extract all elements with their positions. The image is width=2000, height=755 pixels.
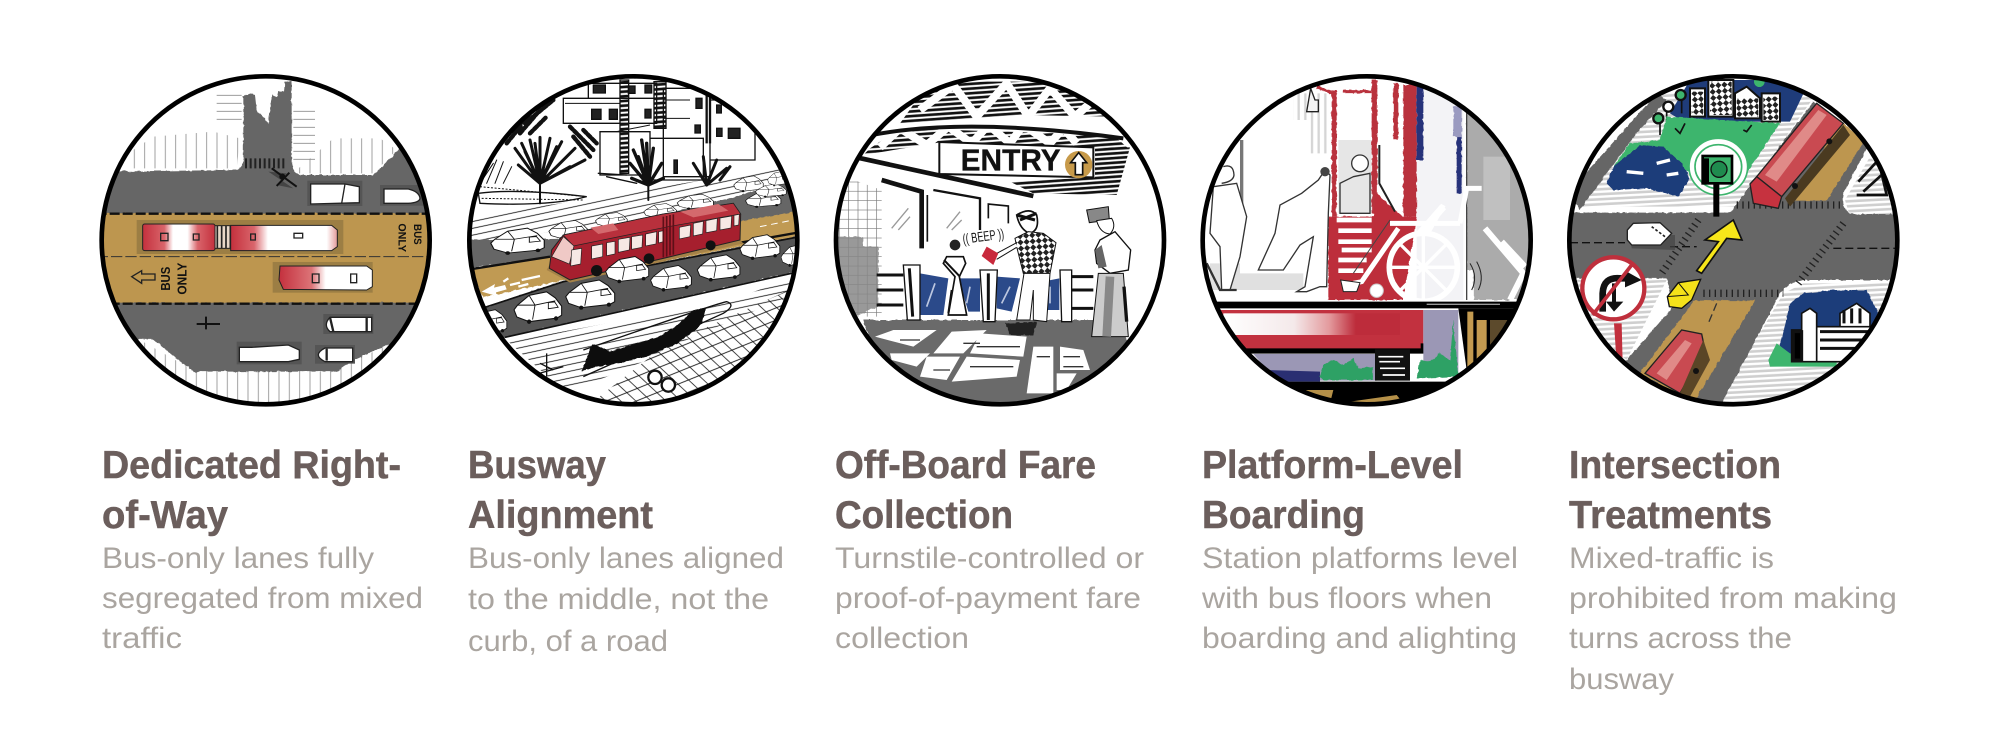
description: Bus-only lanes fully (102, 542, 374, 575)
illustration: intersection with signal and turn restriction (1563, 73, 1903, 410)
grey right side panel (1467, 110, 1537, 300)
yellow turning arrow (1697, 220, 1742, 273)
description: curb, of a road (468, 625, 668, 658)
bus-only lanes (97, 213, 437, 303)
security officer (1087, 207, 1131, 337)
green park and blue pond (1607, 117, 1780, 197)
no-turn sign (1582, 257, 1644, 363)
illustration: top-down busway with bus-only lanes (97, 73, 437, 410)
panel: dedicated right-of-way (97, 73, 437, 655)
bus lane (470, 210, 803, 297)
heading (102, 444, 401, 537)
text: off-board fare collection (835, 444, 1144, 655)
road marking: BUS ONLY, left (132, 262, 190, 295)
text: dedicated right-of-way (102, 444, 423, 655)
description: prohibited from making (1569, 582, 1897, 615)
dark lane with gold stripes (1277, 308, 1537, 410)
cars in mixed traffic (237, 181, 423, 364)
heading: Dedicated Right- (102, 444, 401, 487)
description: Station platforms level (1202, 542, 1518, 575)
red bus, lower (1645, 330, 1710, 397)
red articulated bus (547, 203, 743, 283)
red buses (137, 220, 373, 293)
heading: Collection (835, 494, 1013, 537)
description: segregated from mixed (102, 582, 423, 615)
passenger with card (982, 211, 1056, 335)
yellow taxi (1667, 279, 1701, 308)
bus lanes (1795, 120, 1865, 201)
description: turns across the (1569, 622, 1792, 655)
heading (1569, 444, 1781, 537)
heading (1202, 444, 1463, 537)
icon: gold circle with up arrow (1065, 151, 1092, 178)
upper mixed-traffic road with side street (97, 82, 437, 215)
heading (468, 444, 653, 537)
asphalt cross streets (1567, 102, 1903, 407)
pale interior background (1293, 93, 1330, 153)
motorbike at junction (268, 168, 297, 188)
road marking: BUS ONLY, left: ONLY (176, 262, 190, 295)
description: traffic (102, 622, 182, 655)
heading: of-Way (102, 494, 228, 537)
description: proof-of-payment fare (835, 582, 1141, 615)
illustration: wheelchair boarding from level platform (1197, 73, 1537, 410)
step box (1375, 349, 1410, 381)
truss at right (1857, 160, 1887, 195)
cars in front of the bus (471, 235, 808, 335)
red bus, upper (1750, 103, 1850, 208)
woman passenger (943, 240, 967, 315)
heading: Treatments (1569, 494, 1772, 537)
description: busway (1569, 663, 1674, 696)
floor planks (863, 320, 1130, 407)
description (1569, 542, 1897, 696)
red door frame (1317, 80, 1462, 300)
wire fence and grey building (838, 181, 882, 317)
description: Bus-only lanes aligned (468, 542, 784, 575)
road marking: BUS ONLY, right (398, 224, 422, 252)
grass (1320, 320, 1458, 380)
description: boarding and alighting (1202, 622, 1517, 655)
white car (1627, 223, 1675, 250)
description (102, 542, 423, 655)
background buildings and trees (1653, 76, 1810, 135)
illustration: station entry with turnstiles (830, 73, 1170, 410)
illustration: articulated bus in median busway (463, 73, 808, 410)
trees and foliage (483, 100, 730, 203)
roof truss (853, 82, 1130, 196)
road marking: BUS ONLY, right: ONLY (395, 223, 407, 252)
description (468, 542, 784, 658)
entry sign: ENTRY (961, 144, 1061, 178)
bicycle in lower road (197, 317, 220, 329)
wheelchair (1341, 188, 1482, 301)
upper traffic lane (472, 184, 792, 268)
description: Mixed-traffic is (1569, 542, 1774, 575)
panel: busway alignment (463, 73, 808, 658)
heading: Busway (468, 444, 606, 487)
description (835, 542, 1144, 655)
lower mixed-traffic road (97, 302, 437, 372)
text: platform-level boarding (1201, 444, 1518, 655)
road marking: BUS ONLY, right: BUS (411, 224, 423, 245)
lane marking: arrow and bus text (482, 276, 540, 296)
lower right building (1768, 290, 1878, 367)
rails behind gates (877, 275, 1093, 308)
light grey land blocks (1570, 93, 1903, 407)
blue turnstile gates (920, 273, 1059, 315)
sidewalk hatching (472, 169, 780, 240)
minor road (1575, 97, 1662, 200)
description: with bus floors when (1201, 582, 1492, 615)
panel: intersection treatments (1563, 73, 1903, 696)
description: collection (835, 622, 969, 655)
entry sign (939, 142, 1093, 178)
text: intersection treatments (1569, 444, 1897, 696)
green traffic signal (1689, 138, 1748, 217)
purple-grey shadow ground (1253, 310, 1458, 381)
text: busway alignment (468, 444, 784, 658)
heading: Boarding (1202, 494, 1365, 537)
description: Turnstile-controlled or (835, 542, 1144, 575)
standing passenger at left (1207, 166, 1247, 290)
lamp (1307, 88, 1318, 112)
heading: Platform-Level (1202, 444, 1463, 487)
crosswalks (1662, 205, 1843, 293)
heading: Intersection (1569, 444, 1781, 487)
seated passenger (1258, 155, 1370, 292)
beep sound label: (( BEEP )) (962, 225, 1005, 247)
red bus-side platform (1210, 304, 1537, 351)
turnstile posts (903, 265, 1072, 322)
panel: platform-level boarding (1197, 73, 1537, 655)
description (1201, 542, 1518, 655)
heading: Off-Board Fare (835, 444, 1096, 487)
cars behind the bus (491, 171, 788, 255)
background buildings (563, 80, 755, 180)
door steps (1337, 220, 1372, 271)
lower sidewalk, planting and paving (510, 283, 790, 402)
heading: Alignment (468, 494, 653, 537)
description: to the middle, not the (468, 583, 769, 616)
panel: off-board fare collection (830, 73, 1170, 655)
heading (835, 444, 1096, 537)
road marking: BUS ONLY, left: BUS (159, 267, 173, 291)
lower traffic lane (483, 235, 803, 337)
station glass wall (882, 180, 1008, 248)
grab pole (1379, 145, 1395, 212)
